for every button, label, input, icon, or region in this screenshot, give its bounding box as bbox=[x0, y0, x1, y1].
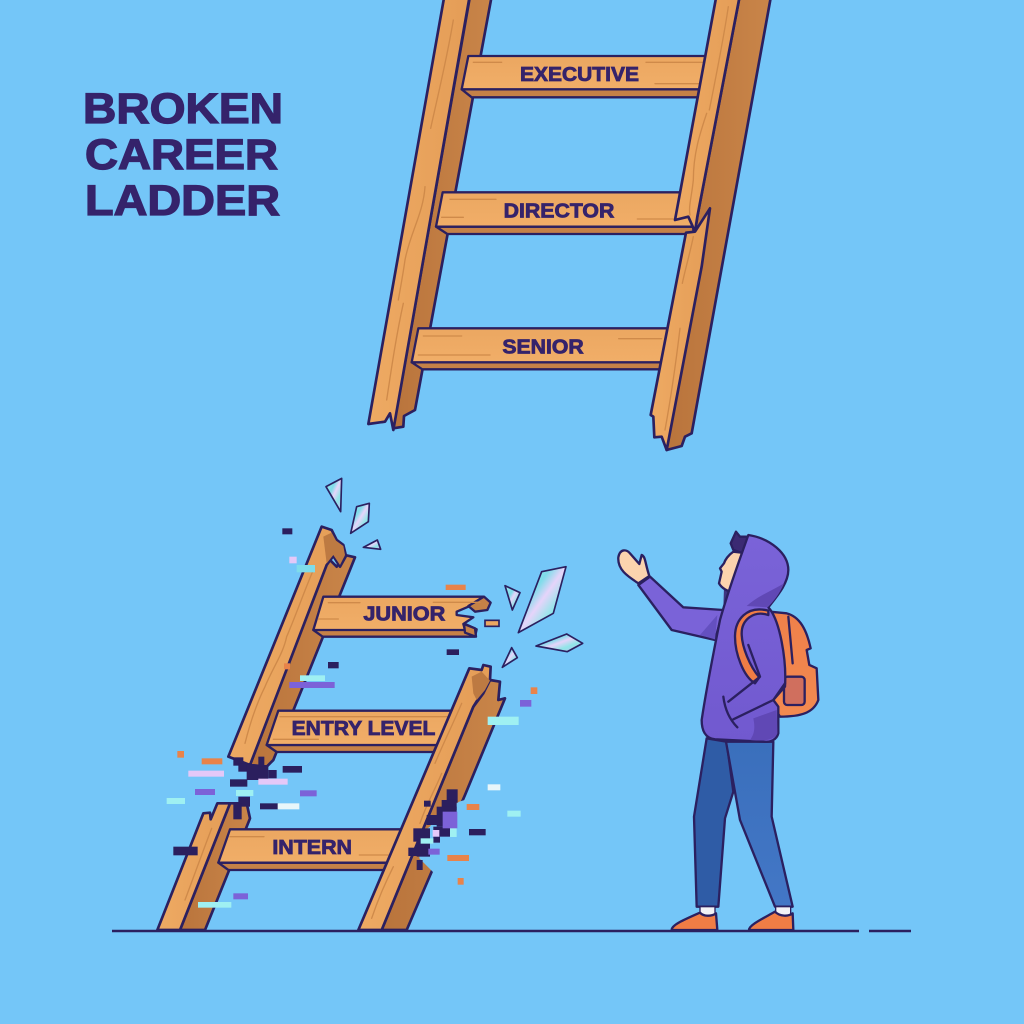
shoes bbox=[672, 912, 793, 930]
rung: intern: INTERN bbox=[272, 836, 352, 859]
cyan pixels bbox=[167, 565, 521, 908]
rung: junior, snapped end bbox=[313, 597, 491, 637]
wood chip bbox=[485, 620, 499, 626]
dark pixel clusters bbox=[173, 528, 486, 870]
face bbox=[719, 552, 748, 592]
left rail upper piece bbox=[228, 527, 355, 767]
raised arm bbox=[638, 577, 723, 640]
pink pixels bbox=[188, 557, 439, 837]
upper ladder bbox=[368, 0, 771, 450]
crystal shards bbox=[326, 478, 583, 667]
rung: entry level bbox=[267, 711, 460, 752]
rung: entry level: ENTRY LEVEL bbox=[292, 717, 435, 740]
rung: senior bbox=[412, 328, 670, 369]
neck bbox=[723, 587, 733, 608]
right rail bbox=[651, 0, 771, 450]
rung: executive: EXECUTIVE bbox=[520, 63, 639, 86]
hoodie bbox=[700, 535, 788, 742]
orange pixels bbox=[177, 585, 537, 885]
title: BROKEN bbox=[83, 85, 283, 133]
right rail bbox=[358, 665, 505, 930]
white pixels bbox=[278, 784, 500, 809]
arm in pocket outline bbox=[723, 645, 785, 727]
socks bbox=[700, 907, 791, 915]
ground line bbox=[112, 930, 911, 932]
rung: intern bbox=[218, 829, 407, 870]
back leg bbox=[694, 738, 733, 907]
left rail bbox=[368, 0, 491, 430]
backpack strap bbox=[735, 609, 768, 683]
person with backpack bbox=[618, 532, 818, 930]
rung: executive bbox=[462, 56, 710, 97]
rung: junior, snapped end: JUNIOR bbox=[363, 603, 445, 626]
rung: director bbox=[436, 192, 693, 234]
rung: director: DIRECTOR bbox=[504, 199, 614, 222]
hair bbox=[731, 532, 748, 553]
left rail lower piece bbox=[157, 803, 250, 930]
rung: senior: SENIOR bbox=[502, 335, 584, 358]
glitch debris bbox=[167, 528, 537, 908]
title: LADDER bbox=[85, 177, 280, 225]
backpack bbox=[770, 612, 818, 717]
purple pixels bbox=[195, 682, 531, 899]
title bbox=[83, 85, 283, 225]
hand bbox=[618, 550, 649, 583]
title: CAREER bbox=[85, 131, 278, 179]
lower broken ladder bbox=[157, 478, 583, 930]
front leg bbox=[726, 742, 793, 907]
